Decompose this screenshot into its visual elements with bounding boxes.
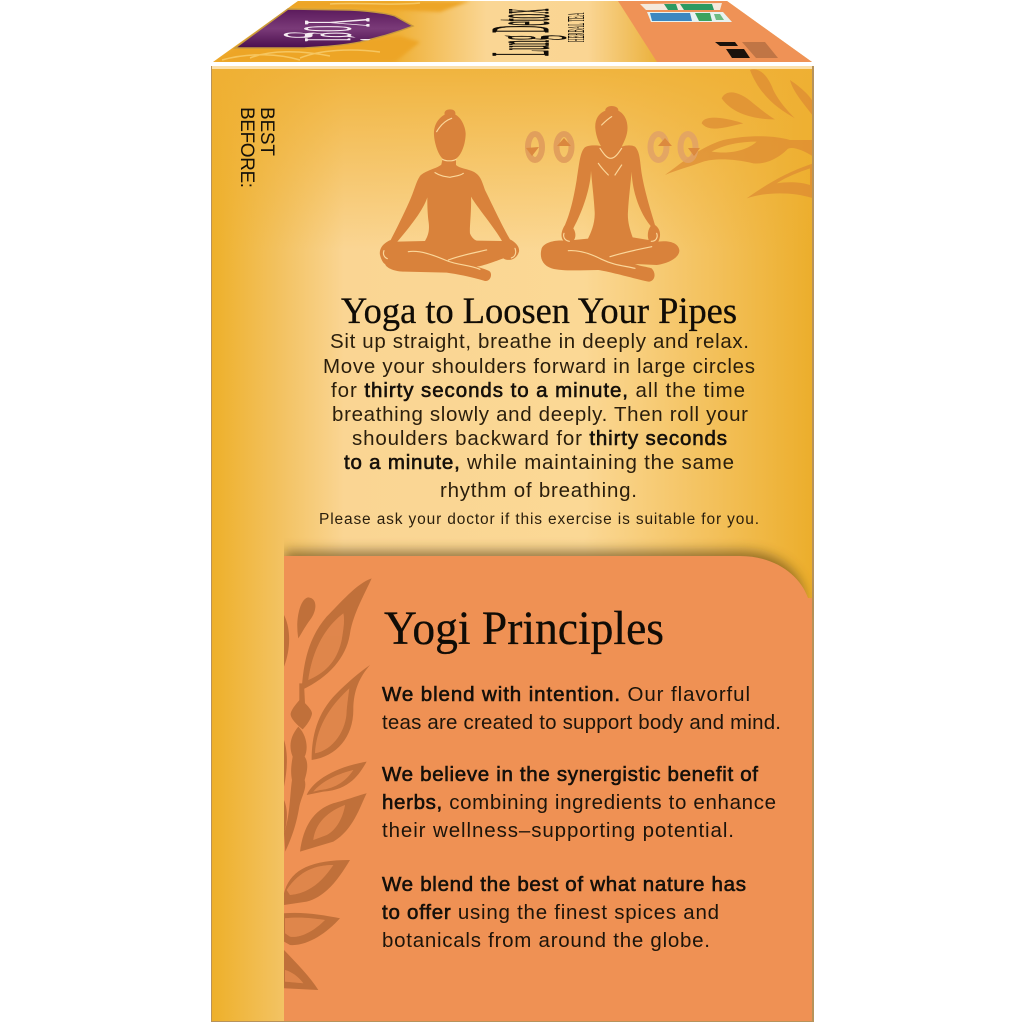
decorative leaves top right bbox=[665, 69, 813, 198]
principle: intention: teas are created to support body and mind. bbox=[382, 711, 781, 734]
principle: synergy: their wellness–supporting potential. bbox=[382, 819, 734, 842]
purple banner bbox=[235, 9, 413, 48]
principle: intention: We blend with intention. Our flavorful bbox=[382, 683, 750, 706]
best before label: BEFORE: bbox=[236, 107, 257, 188]
rotation arrows: left shoulder bbox=[526, 134, 572, 160]
principle: nature bbox=[382, 873, 746, 952]
best before label bbox=[236, 107, 277, 188]
gold pattern around banner bbox=[213, 1, 470, 62]
figure: seated yoga pose bbox=[380, 109, 519, 281]
box front face bbox=[211, 66, 814, 1022]
botanical illustration bbox=[284, 578, 372, 990]
barcode-like marks bbox=[715, 42, 778, 58]
yoga instructions bbox=[323, 330, 755, 502]
figure: shoulder rolls pose bbox=[541, 106, 679, 282]
best before label: BEST bbox=[256, 107, 277, 156]
yoga instructions: rhythm of breathing. bbox=[440, 479, 637, 502]
principle: synergy: We believe in the synergistic benefit of bbox=[382, 763, 758, 786]
principle: intention bbox=[382, 683, 781, 734]
hatch fill inside leaves bbox=[285, 613, 353, 983]
yoga instructions: breathing slowly and deeply. Then roll your bbox=[332, 403, 748, 426]
brand name on banner: Yogi bbox=[283, 18, 392, 41]
yoga instructions: for thirty seconds to a minute, all the time bbox=[331, 379, 745, 402]
principle: synergy bbox=[382, 763, 776, 842]
box top flap bbox=[213, 1, 812, 62]
product name: Lung Detox bbox=[474, 9, 566, 56]
doctor disclaimer: Please ask your doctor if this exercise is suitable for you. bbox=[319, 511, 759, 528]
heading: yogi principles: Yogi Principles bbox=[384, 602, 664, 655]
panel shadow bbox=[284, 542, 812, 598]
yoga instructions: Move your shoulders forward in large circles bbox=[323, 355, 755, 378]
orange end of flap bbox=[618, 1, 812, 62]
principle: synergy: herbs, combining ingredients to enhance bbox=[382, 791, 776, 814]
principle: nature: botanicals from around the globe. bbox=[382, 929, 710, 952]
yoga instructions: shoulders backward for thirty seconds bbox=[352, 427, 727, 450]
principle: nature: to offer using the finest spices and bbox=[382, 901, 719, 924]
principle: nature: We blend the best of what nature has bbox=[382, 873, 746, 896]
yoga instructions: Sit up straight, breathe in deeply and relax. bbox=[330, 330, 749, 353]
yoga instructions: to a minute, while maintaining the same bbox=[344, 451, 734, 474]
left gold strip bbox=[212, 556, 284, 1021]
panel: yogi principles bbox=[284, 556, 812, 1021]
certification logos bbox=[640, 3, 732, 22]
product subtitle: HERBAL TEA bbox=[563, 12, 590, 42]
rotation arrows: right shoulder bbox=[650, 134, 700, 160]
heading: yoga: Yoga to Loosen Your Pipes bbox=[341, 291, 737, 332]
